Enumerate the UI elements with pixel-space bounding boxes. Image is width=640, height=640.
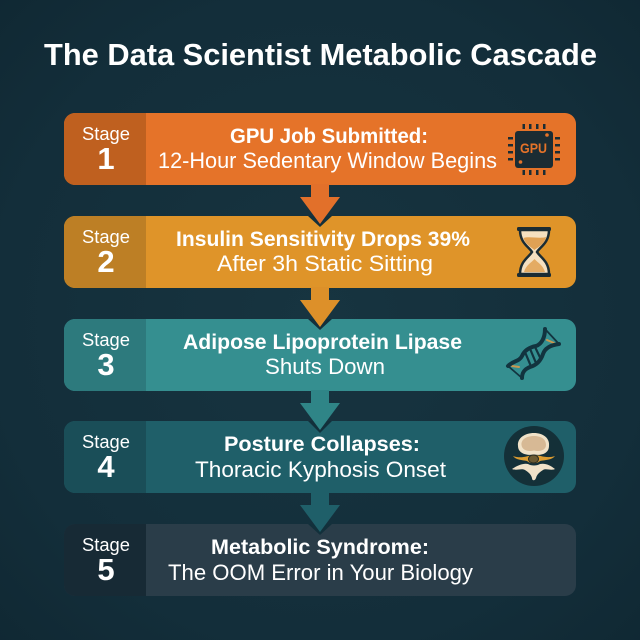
panel: stage 1: GPU Job Submitted: xyxy=(230,125,428,148)
panel: stage 5: The OOM Error in Your Biology xyxy=(168,560,473,585)
panel: stage 4: Thoracic Kyphosis Onset xyxy=(195,457,446,482)
panel: stage 1: 12-Hour Sedentary Window Begins xyxy=(158,148,497,173)
panel: stage 2 xyxy=(64,216,576,288)
panel: stage 4: Posture Collapses: xyxy=(224,433,420,456)
icon: GPU chip: GPU xyxy=(520,140,547,156)
arrow: stage 2 to 3 xyxy=(300,287,340,330)
panel: stage 4: Stage xyxy=(82,431,130,452)
icon: DNA helix xyxy=(508,329,559,378)
panel: stage 5: Metabolic Syndrome: xyxy=(211,536,429,559)
panel: stage 5: 5 xyxy=(97,552,115,587)
panel: stage 2: Stage xyxy=(82,226,130,247)
panel: stage 2: Insulin Sensitivity Drops 39% xyxy=(176,228,470,251)
panel: stage 1: Stage xyxy=(82,123,130,144)
panel: stage 3: Adipose Lipoprotein Lipase xyxy=(183,331,462,354)
panel: stage 5: Stage xyxy=(82,534,130,555)
panel: stage 1: 1 xyxy=(97,141,115,176)
title: The Data Scientist Metabolic Cascade xyxy=(44,37,597,72)
arrow: stage 1 to 2 xyxy=(300,184,340,227)
icon: vertebra xyxy=(504,426,564,486)
panel: stage 2: 2 xyxy=(97,244,115,279)
arrow: stage 3 to 4 xyxy=(300,390,340,433)
panel: stage 5 xyxy=(64,524,576,596)
panel: stage 4 xyxy=(64,421,576,493)
panel: stage 3 xyxy=(64,319,576,391)
panel: stage 4: 4 xyxy=(97,449,115,484)
arrow: stage 4 to 5 xyxy=(300,492,340,535)
panel: stage 3: Shuts Down xyxy=(265,354,385,379)
icon: hourglass xyxy=(517,227,551,277)
icon: GPU chip xyxy=(508,124,560,175)
panel: stage 1 xyxy=(64,113,576,185)
panel: stage 3: Stage xyxy=(82,329,130,350)
panel: stage 2: After 3h Static Sitting xyxy=(217,251,433,276)
panel: stage 3: 3 xyxy=(97,347,115,382)
